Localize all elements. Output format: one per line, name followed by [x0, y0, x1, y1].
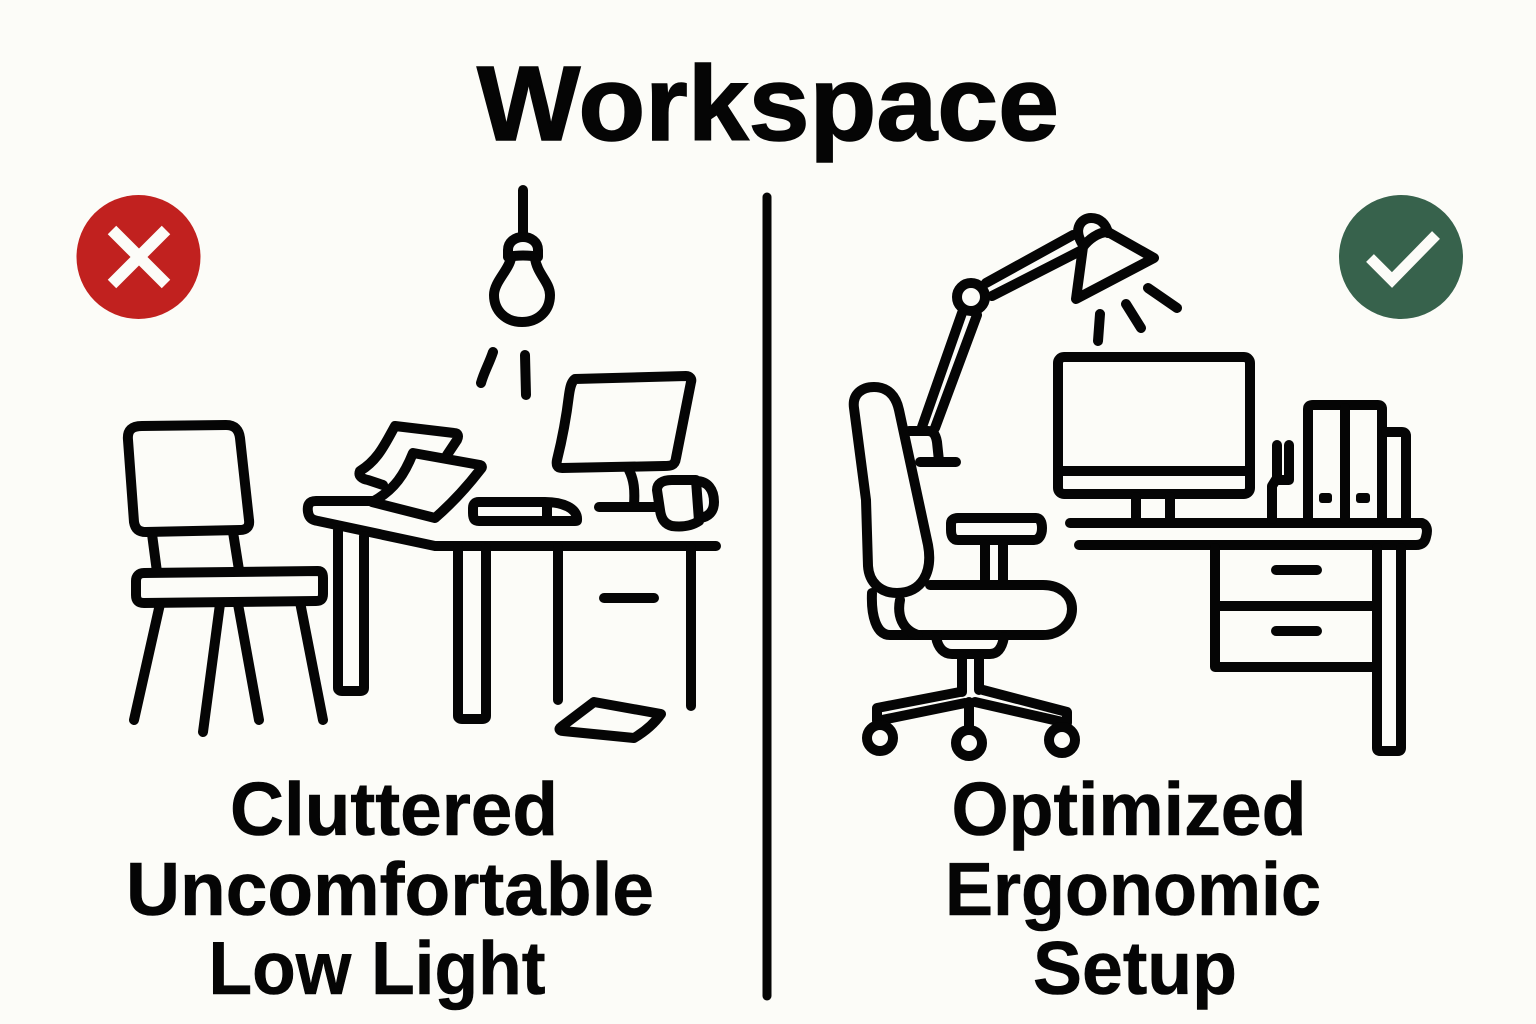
icon: messy desk — [308, 501, 716, 719]
icon: mug — [657, 480, 714, 526]
right caption — [945, 767, 1321, 1010]
icon: office chair — [854, 387, 1075, 756]
panel: ergonomic workspace illustration — [854, 218, 1427, 756]
title: Workspace — [477, 45, 1059, 163]
icon: keyboard — [473, 502, 577, 521]
icon: monitor — [557, 376, 691, 507]
icon: green check badge — [1339, 195, 1463, 319]
right caption: Ergonomic — [945, 847, 1321, 931]
icon: paper stack — [359, 426, 482, 518]
icon: paper on floor — [560, 702, 661, 738]
icon: plant — [1272, 445, 1289, 519]
icon: desk lamp — [909, 218, 1177, 462]
right caption: Setup — [1033, 926, 1237, 1010]
icon: simple chair — [128, 425, 323, 732]
left caption: Uncomfortable — [126, 847, 654, 931]
right caption: Optimized — [952, 767, 1306, 851]
panel: cluttered workspace illustration — [128, 190, 716, 738]
icon: large monitor — [1058, 357, 1250, 520]
left caption — [126, 767, 654, 1010]
left caption: Cluttered — [230, 767, 558, 851]
left caption: Low Light — [208, 926, 546, 1010]
icon: hanging bulb — [481, 190, 550, 395]
icon: desk — [1070, 523, 1427, 751]
center divider — [762, 197, 772, 996]
icon: binders — [1308, 405, 1406, 519]
icon: red cross badge — [76, 195, 200, 319]
